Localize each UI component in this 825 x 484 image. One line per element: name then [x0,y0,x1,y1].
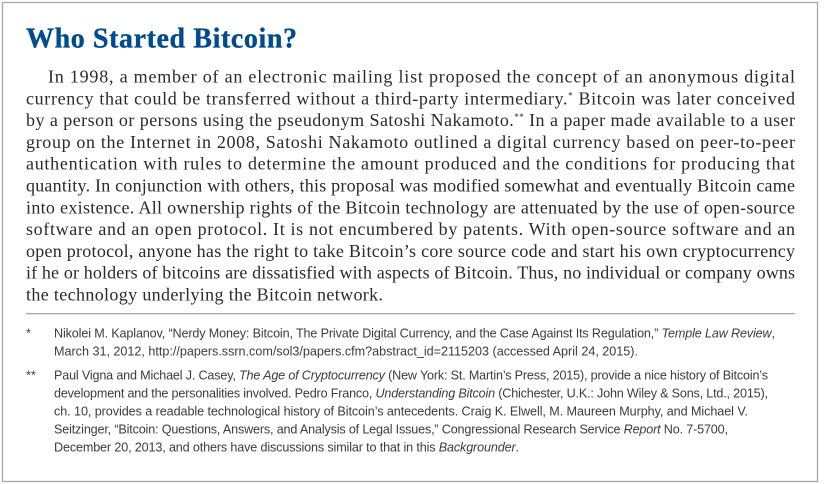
text block: main paragraph: open protocol, anyone has the right to take Bitcoin’s core source code and start his own cryptocurrency [26,241,795,261]
text block: main paragraph: the technology underlying the Bitcoin network. [26,284,383,304]
title: Who Started Bitcoin? [26,24,297,54]
text block: main paragraph: by a person or persons using the pseudonym Satoshi Nakamoto. [26,110,514,130]
footnote rule [26,313,795,314]
text block: main paragraph: * [568,90,573,100]
text block: main paragraph: ** [514,112,524,122]
footnote: single asterisk: * [26,327,31,341]
text block: main paragraph: currency that could be transferred without a third-party intermediary. [26,88,567,108]
text block: main paragraph: Bitcoin was later conceived [573,88,795,108]
text block: main paragraph: software and an open protocol. It is not encumbered by patents. With open-source software and an [26,219,795,239]
footnote: double asterisk: ch. 10, provides a readable technological history of Bitcoin’s antecedents. Craig K. Elwell, M. Maureen Murphy, and Michael V. [54,404,748,418]
text block: main paragraph: group on the Internet in 2008, Satoshi Nakamoto outlined a digital currency based on peer-to-peer [26,132,795,152]
text block: main paragraph: quantity. In conjunction with others, this proposal was modified somewhat and eventually Bitcoin came [26,176,795,196]
footnote: single asterisk: Nikolei M. Kaplanov, “Nerdy Money: Bitcoin, The Private Digital Currency, and the Case Against Its Regulation,” Temple Law Review, [54,327,775,341]
footnote: double asterisk: development and the personalities involved. Pedro Franco, Understanding Bitcoin (Chichester, U.K.: John Wiley & Sons, Ltd., 2015), [54,386,768,400]
text block: main paragraph: authentication with rules to determine the amount produced and the conditions for producing that [26,154,795,174]
footnote: double asterisk: December 20, 2013, and others have discussions similar to that in this Backgrounder. [54,440,519,454]
footnote: single asterisk [26,327,775,359]
footnote: double asterisk: ** [26,368,36,382]
footnote: single asterisk: March 31, 2012, http://papers.ssrn.com/sol3/papers.cfm?abstract_id=2115203 (accessed April 24, 2015). [54,345,638,359]
footnote: double asterisk [26,368,768,454]
footnote: double asterisk: Paul Vigna and Michael J. Casey, The Age of Cryptocurrency (New York: St. Martin’s Press, 2015), provide a nice history of Bitcoin’s [54,368,768,382]
text block: main paragraph: In 1998, a member of an electronic mailing list proposed the concept of an anonymous digital [48,66,795,86]
text block: main paragraph: into existence. All ownership rights of the Bitcoin technology are attenuated by the use of open-source [26,197,795,217]
text block: main paragraph [26,66,795,304]
text block: main paragraph: if he or holders of bitcoins are dissatisfied with aspects of Bitcoin. Thus, no individual or company owns [26,263,795,283]
text block: main paragraph: In a paper made available to a user [524,110,795,130]
footnote: double asterisk: Seitzinger, “Bitcoin: Questions, Answers, and Analysis of Legal Issues,” Congressional Research Service Report No. 7-5700, [54,422,728,436]
